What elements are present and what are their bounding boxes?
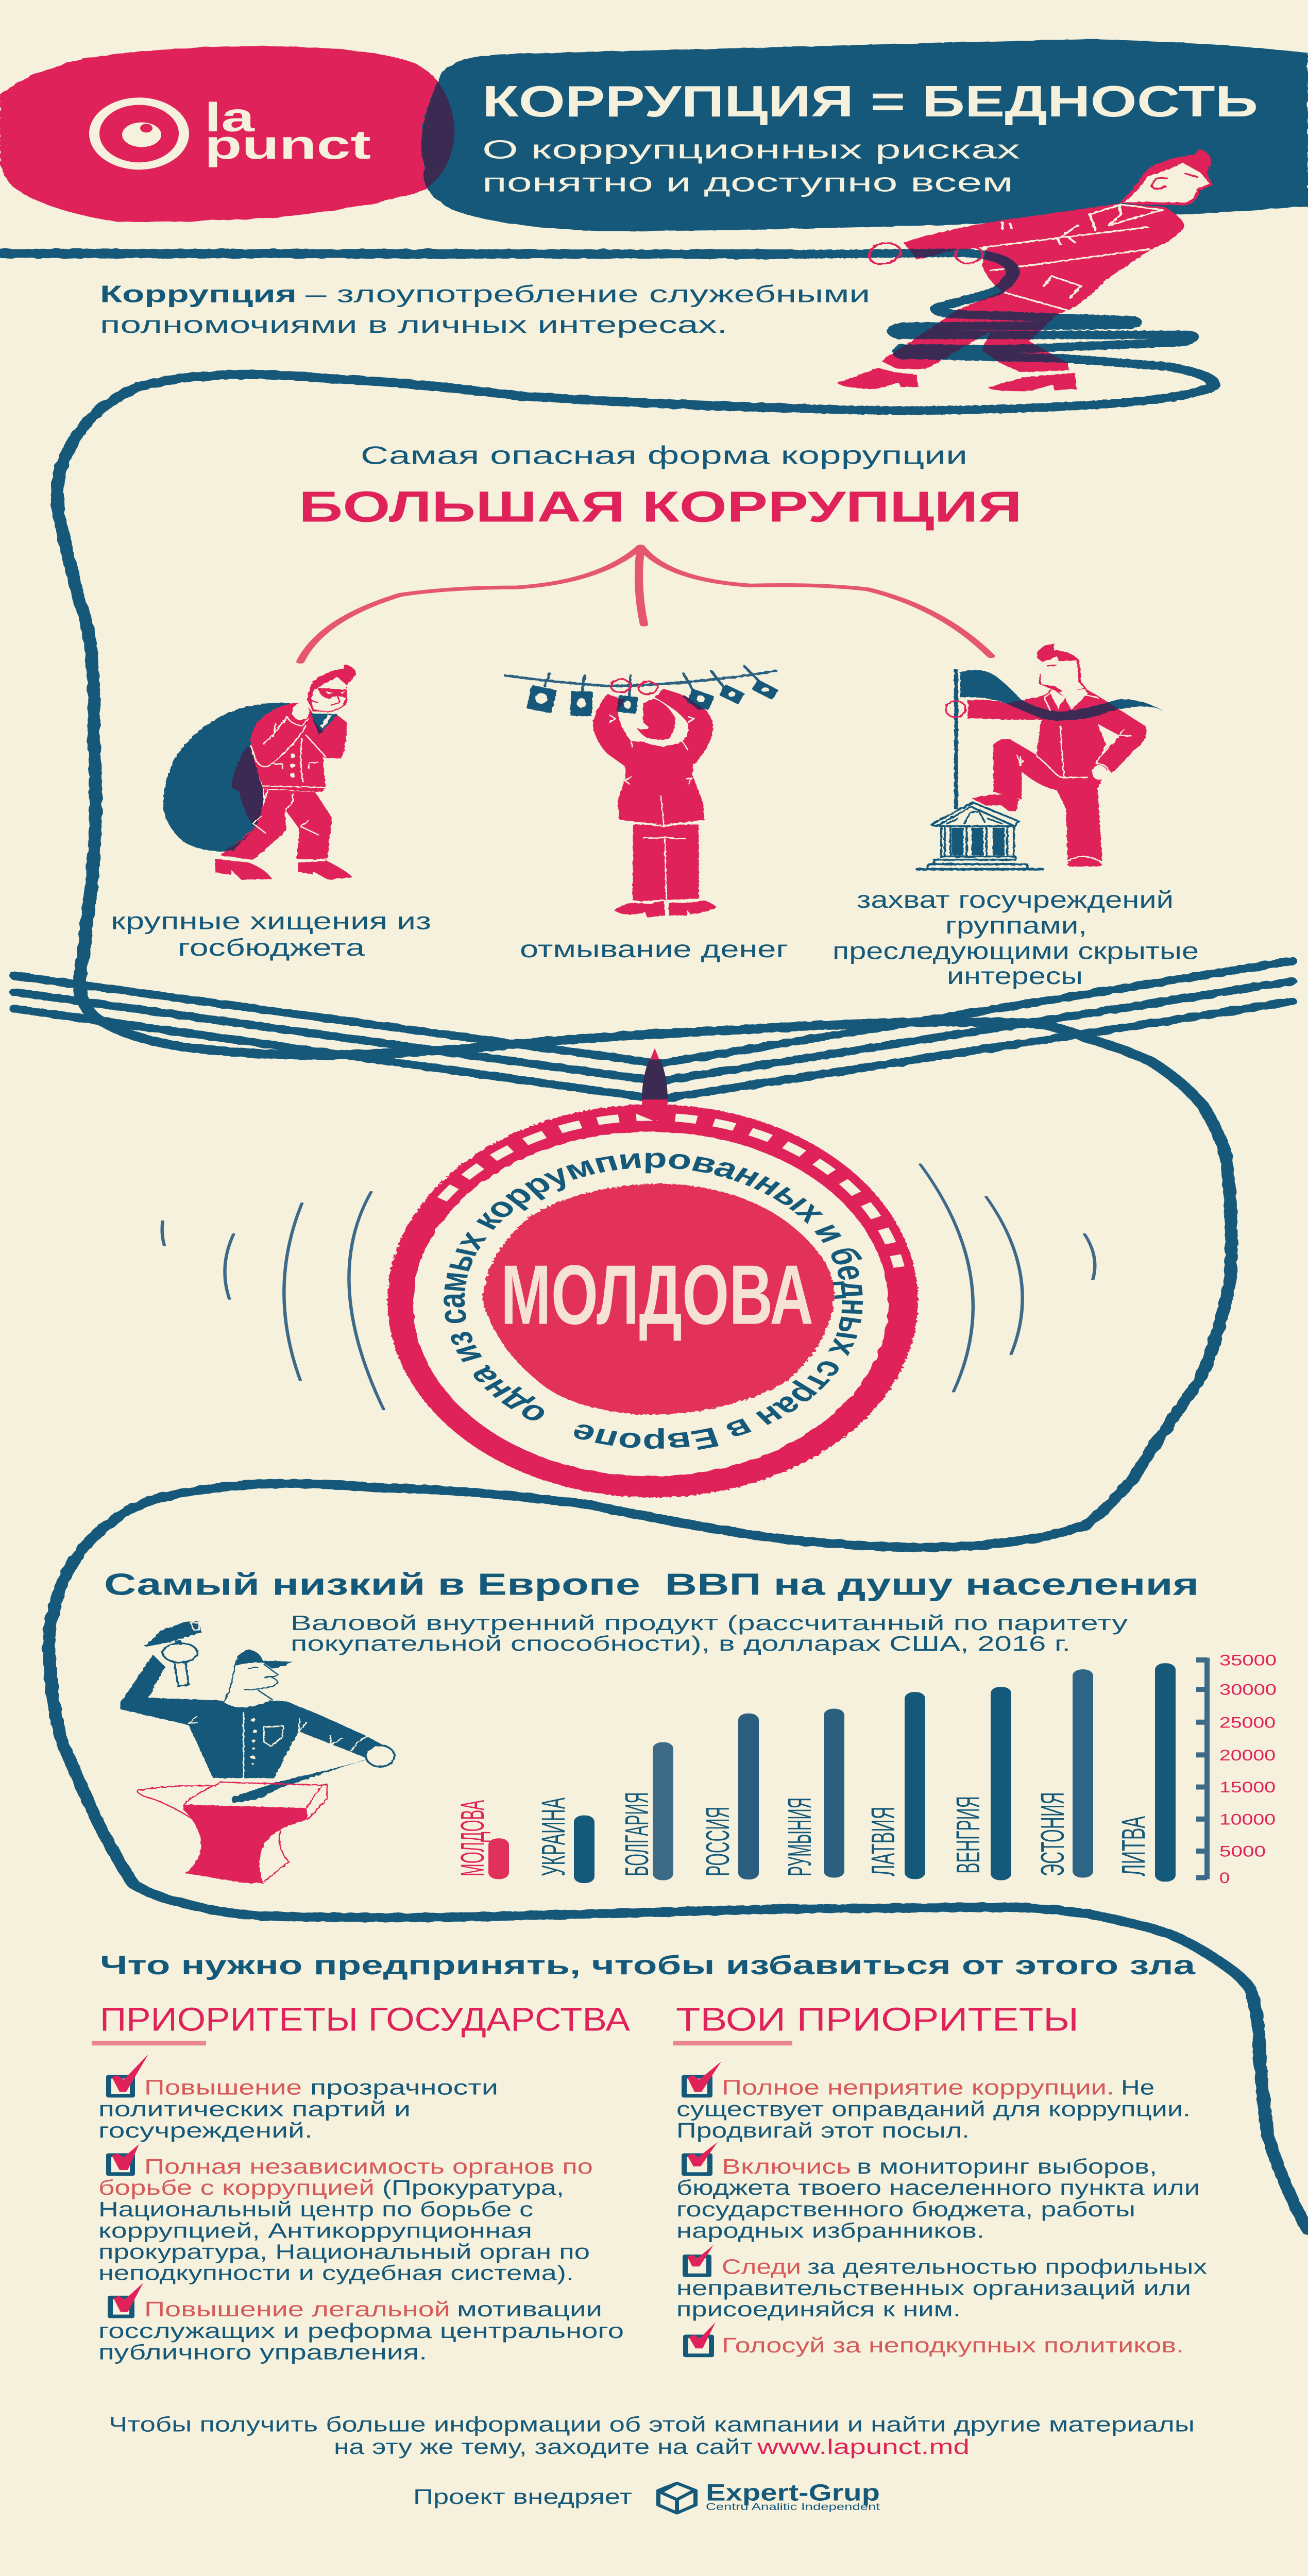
list: your priorities: Полное неприятие коррупции.: [722, 2076, 1114, 2099]
banknotes: [526, 680, 778, 716]
country labels: ВЕНГРИЯ: [949, 1796, 987, 1874]
country labels: ЛАТВИЯ: [864, 1807, 902, 1876]
logo: Expert-Grup: Centru Analitic Independent: [706, 2501, 880, 2513]
list: your priorities: народных избранников.: [676, 2219, 984, 2242]
cap: [233, 1650, 293, 1669]
axis labels: [1219, 1652, 1277, 1887]
axis labels: 35000: [1219, 1652, 1277, 1669]
flagpole: [954, 669, 958, 809]
country labels: УКРАИНА: [535, 1798, 572, 1876]
building: [917, 803, 1043, 869]
sack: [163, 703, 290, 852]
illustration: inspector at anvil: [121, 1621, 394, 1883]
list: state priorities: публичного управления.: [98, 2341, 427, 2364]
footer text: на эту же тему, заходите на сайт: [334, 2435, 753, 2459]
country labels: ЭСТОНИЯ: [1034, 1792, 1071, 1876]
list: state priorities: коррупцией, Антикоррупционная: [98, 2219, 532, 2242]
country labels: МОЛДОВА: [454, 1800, 491, 1876]
caption: embezzlement: [111, 908, 431, 961]
axis labels: 20000: [1219, 1747, 1276, 1764]
axis labels: 5000: [1219, 1843, 1266, 1860]
country labels: РУМЫНИЯ: [781, 1798, 818, 1876]
column heading: state priorities: [92, 2001, 630, 2045]
heading: most dangerous form: Самая опасная форма коррупции: [361, 440, 967, 469]
logo: la punct: la: [205, 94, 255, 140]
uniform details: [189, 1623, 367, 1778]
axis labels: 15000: [1219, 1778, 1276, 1796]
hat held up: [144, 1621, 202, 1647]
clothespins: [545, 667, 759, 696]
list: your priorities: неправительственных организаций или: [676, 2276, 1191, 2300]
arm cutout: [1098, 724, 1120, 762]
details: [609, 715, 704, 903]
chart subtitle: [291, 1611, 1128, 1655]
list: your priorities: Голосуй за неподкупных политиков.: [722, 2333, 1184, 2357]
definition text: – злоупотребление служебными: [305, 281, 870, 308]
list: state priorities: прозрачности: [310, 2076, 498, 2099]
list: state priorities: Повышение легальной: [144, 2297, 450, 2321]
rope over man overlap: [893, 248, 1068, 363]
chart subtitle: Валовой внутренний продукт (рассчитанный по паритету: [291, 1611, 1128, 1635]
column heading: your priorities: ТВОИ ПРИОРИТЕТЫ: [676, 2001, 1079, 2038]
list: state priorities: госслужащих и реформа центрального: [98, 2319, 624, 2343]
man: head: [1119, 149, 1213, 206]
list: state priorities: (Прокуратура,: [382, 2176, 564, 2199]
subtitle: [482, 135, 1020, 197]
man: jacket and trousers: [881, 204, 1184, 372]
main rope: [49, 375, 1308, 2230]
definition text: полномочиями в личных интересах.: [100, 311, 727, 338]
list: your priorities: государственного бюджета, работы: [676, 2197, 1135, 2221]
list: your priorities: существует оправданий для коррупции.: [676, 2097, 1191, 2121]
caption: capture: [833, 886, 1199, 990]
list: state priorities: Повышение: [144, 2076, 302, 2099]
caption: capture: группами,: [945, 912, 1087, 939]
list: state priorities: [98, 2076, 624, 2364]
stripes band: [15, 961, 1292, 1099]
flag overlap: [1005, 700, 1119, 721]
axis labels: 25000: [1219, 1714, 1276, 1731]
illustration: thief with sack: [163, 664, 356, 880]
title: КОРРУПЦИЯ = БЕДНОСТЬ: [482, 77, 1258, 126]
jacket: [250, 703, 347, 792]
country labels: [454, 1792, 1152, 1876]
man: shoes: [837, 368, 1077, 391]
list: state priorities: Национальный центр по борьбе с: [98, 2197, 533, 2221]
list: your priorities: Включись: [722, 2155, 851, 2178]
caption: embezzlement: крупные хищения из: [111, 908, 431, 935]
caption: embezzlement: госбюджета: [178, 934, 365, 961]
banknote overlap: [618, 695, 704, 711]
bars: [488, 1663, 1176, 1883]
list: your priorities: Следи: [722, 2255, 801, 2278]
body with raised arms: [593, 689, 713, 824]
footer text: [109, 2413, 1195, 2459]
medal: Moldova: [160, 1048, 1096, 1498]
caption: laundering: отмывание денег: [520, 936, 788, 963]
country name: МОЛДОВА: [501, 1247, 813, 1342]
blob overlap: [421, 81, 454, 189]
heading: what to do: Что нужно предпринять, чтобы избавиться от этого зла: [100, 1950, 1196, 1980]
logo: Expert-Grup: Expert-Grup: [706, 2480, 880, 2506]
list: your priorities: в мониторинг выборов,: [857, 2155, 1157, 2178]
list: state priorities: борьбе с коррупцией: [98, 2176, 375, 2199]
hand ring: [366, 1745, 394, 1767]
flag: [960, 670, 1167, 720]
body: [966, 688, 1147, 863]
medal ring: [387, 1104, 918, 1498]
red logo blob: [0, 46, 455, 222]
subtitle: О коррупционных рисках: [482, 135, 1020, 164]
caption: capture: преследующими скрытые: [833, 938, 1199, 964]
captions: [111, 886, 1199, 990]
magnifier: [163, 1640, 197, 1686]
rope top line: [0, 253, 804, 255]
shoes: [215, 859, 352, 880]
anvil: [138, 1782, 327, 1883]
man: suit details: [985, 205, 1162, 310]
logo: la punct: [94, 94, 371, 167]
list: state priorities: политических партий и: [98, 2097, 411, 2121]
head: [637, 699, 675, 740]
chart subtitle: покупательной способности), в долларах США, 2016 г.: [291, 1632, 1071, 1655]
arrow pin: [630, 1048, 680, 1122]
clothesline: [505, 671, 776, 686]
illustration: state capture: [917, 643, 1167, 869]
buttons: [290, 753, 295, 777]
footer text: Чтобы получить больше информации об этой кампании и найти другие материалы: [109, 2413, 1195, 2436]
red center: [482, 1184, 834, 1415]
hand on hip: [1092, 765, 1107, 780]
heading: grand corruption: БОЛЬШАЯ КОРРУПЦИЯ: [299, 483, 1022, 531]
body: [121, 1654, 382, 1778]
caption: capture: захват госучреждений: [857, 886, 1174, 913]
sack overlap: [223, 747, 263, 852]
illustration: man pulling rope: [799, 149, 1213, 411]
list: state priorities: мотивации: [457, 2297, 602, 2321]
country labels: ЛИТВА: [1115, 1816, 1152, 1876]
medal: Moldova: одна из самых коррумпированных и бедных стран в Европе: [444, 1153, 863, 1450]
country labels: БОЛГАРИЯ: [618, 1792, 655, 1876]
head: [307, 664, 356, 713]
list: your priorities: Не: [1121, 2076, 1154, 2099]
illustration: laundering money: [505, 667, 778, 917]
blue title blob: [421, 39, 1308, 231]
axis labels: 0: [1219, 1869, 1230, 1887]
circular text: [465, 1167, 842, 1434]
axis labels: 30000: [1219, 1681, 1277, 1698]
suit details: [219, 717, 327, 862]
vibration marks: [162, 1164, 1095, 1410]
suit details: [1017, 693, 1131, 861]
list: your priorities: присоединяйся к ним.: [676, 2297, 961, 2321]
list: your priorities: бюджета твоего населенного пункта или: [676, 2176, 1200, 2199]
scarf: [311, 713, 337, 735]
list: state priorities: Полная независимость органов по: [144, 2155, 593, 2178]
bracket: [300, 547, 991, 662]
definition text: [100, 281, 870, 338]
shoes: [972, 794, 1102, 867]
column heading: state priorities: ПРИОРИТЕТЫ ГОСУДАРСТВА: [100, 2001, 630, 2038]
list: your priorities: за деятельностью профильных: [807, 2255, 1207, 2278]
list: your priorities: Продвигай этот посыл.: [676, 2119, 970, 2142]
list: state priorities: прокуратура, Национальный орган по: [98, 2240, 590, 2263]
hand: [292, 703, 309, 720]
head: [1033, 643, 1087, 693]
trousers: [220, 789, 332, 860]
subtitle: понятно и доступно всем: [482, 168, 1013, 197]
checkboxes: [109, 2054, 721, 2355]
footer text: www.lapunct.md: [757, 2435, 970, 2459]
hand ring: [946, 701, 966, 717]
heading: GDP: Самый низкий в Европе ВВП на душу населения: [104, 1567, 1199, 1601]
definition text: Коррупция: [100, 281, 297, 308]
list: state priorities: госучреждений.: [98, 2119, 313, 2142]
legs: [632, 824, 699, 902]
list: state priorities: неподкупности и судебная система).: [98, 2261, 574, 2284]
hands: [610, 679, 658, 694]
header: [0, 39, 1308, 231]
caption: capture: интересы: [947, 963, 1083, 990]
logo: la punct: punct: [205, 122, 371, 167]
hammer handle: [231, 1759, 366, 1803]
axis: [1196, 1658, 1207, 1879]
shoes: [615, 901, 716, 917]
rope coil: [799, 253, 1213, 411]
shirt and tie: [1050, 688, 1088, 711]
bar chart: GDP per capita: [454, 1652, 1277, 1887]
man: hands: [869, 243, 982, 264]
country labels: РОССИЯ: [699, 1807, 736, 1876]
list: your priorities: [676, 2076, 1207, 2357]
face lines: [224, 1664, 278, 1701]
axis labels: 10000: [1219, 1810, 1276, 1828]
buttons: [251, 1718, 257, 1765]
logo: Expert-Grup: [658, 2480, 880, 2513]
project credit: Проект внедряет: [413, 2485, 632, 2509]
